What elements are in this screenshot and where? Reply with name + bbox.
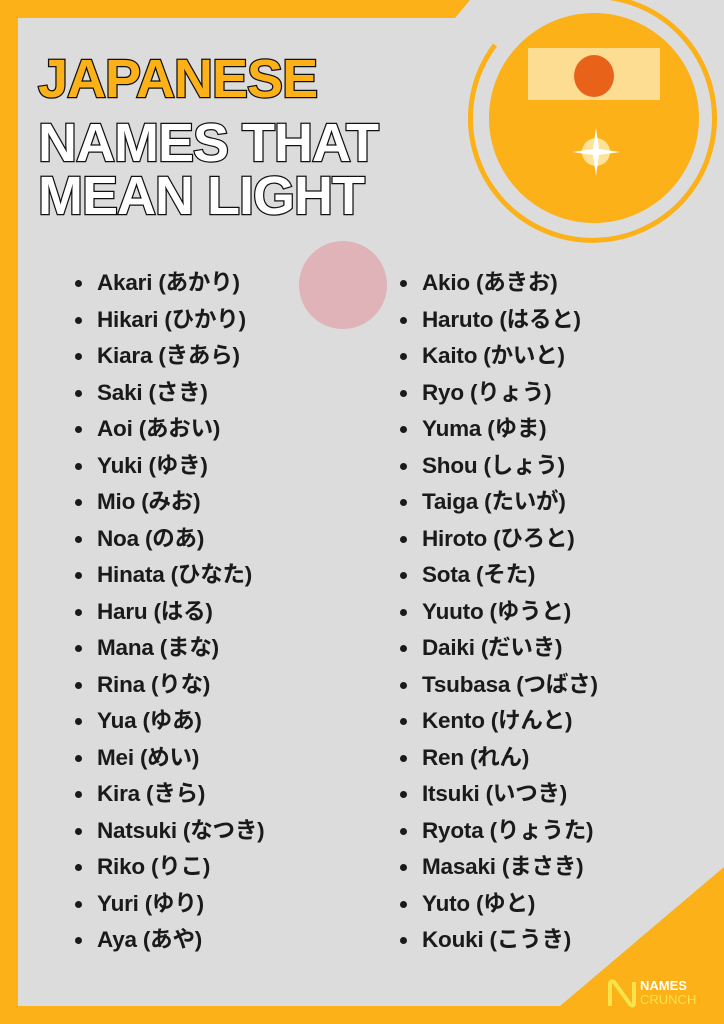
list: left column: Mei (めい)	[97, 744, 199, 770]
list: right column: Itsuki (いつき)	[422, 781, 567, 806]
decorative pink circle	[299, 241, 387, 329]
list: left column: Natsuki (なつき)	[97, 818, 264, 842]
list: left column: Hikari (ひかり)	[97, 306, 246, 332]
list: left column: Hinata (ひなた)	[97, 562, 252, 587]
list: right column: Hiroto (ひろと)	[422, 526, 575, 550]
list: left column: Aoi (あおい)	[97, 416, 220, 441]
logo: CRUNCH	[640, 992, 696, 1007]
list: right column: Sota (そた)	[422, 562, 535, 587]
emblem: sun circle	[468, 0, 717, 243]
title	[37, 49, 380, 226]
list: left column	[75, 270, 264, 952]
list: right column: Ren (れん)	[422, 744, 529, 770]
list: right column: Tsubasa (つばさ)	[422, 672, 598, 696]
list: right column: Ryo (りょう)	[422, 380, 551, 404]
list: left column: Mio (みお)	[97, 489, 200, 514]
list: right column: Kouki (こうき)	[422, 927, 571, 952]
list: left column: Aya (あや)	[97, 927, 202, 952]
list: left column: Saki (さき)	[97, 380, 208, 404]
list: right column: Yuuto (ゆうと)	[422, 598, 571, 624]
list: right column	[400, 270, 598, 952]
list: left column: Riko (りこ)	[97, 854, 210, 879]
list: right column: Masaki (まさき)	[422, 854, 583, 879]
list: right column: Yuma (ゆま)	[422, 416, 546, 441]
list: left column: Yuki (ゆき)	[97, 452, 208, 478]
list: left column: Haru (はる)	[97, 598, 213, 624]
list: left column: Kiara (きあら)	[97, 343, 240, 368]
list: right column: Yuto (ゆと)	[422, 890, 535, 916]
list: right column: Taiga (たいが)	[422, 489, 566, 514]
list: right column: Akio (あきお)	[422, 270, 558, 295]
list: left column: Kira (きら)	[97, 781, 205, 806]
list: right column: Daiki (だいき)	[422, 635, 562, 660]
logo: NAMES	[640, 978, 687, 993]
list: left column: Noa (のあ)	[97, 526, 204, 550]
logo	[608, 978, 696, 1008]
list: left column: Akari (あかり)	[97, 270, 240, 295]
title: NAMES THAT	[38, 113, 378, 173]
list: right column: Kaito (かいと)	[422, 343, 565, 368]
list: left column: Yuri (ゆり)	[97, 890, 204, 916]
list: left column: Mana (まな)	[97, 635, 219, 660]
list: right column: Shou (しょう)	[422, 452, 565, 478]
title: JAPANESE	[38, 49, 317, 109]
list: right column: Ryota (りょうた)	[422, 818, 593, 842]
list: right column: Kento (けんと)	[422, 708, 572, 733]
list: left column: Yua (ゆあ)	[97, 708, 202, 733]
list: left column: Rina (りな)	[97, 672, 210, 696]
list: right column: Haruto (はると)	[422, 306, 581, 332]
title: MEAN LIGHT	[38, 166, 364, 226]
